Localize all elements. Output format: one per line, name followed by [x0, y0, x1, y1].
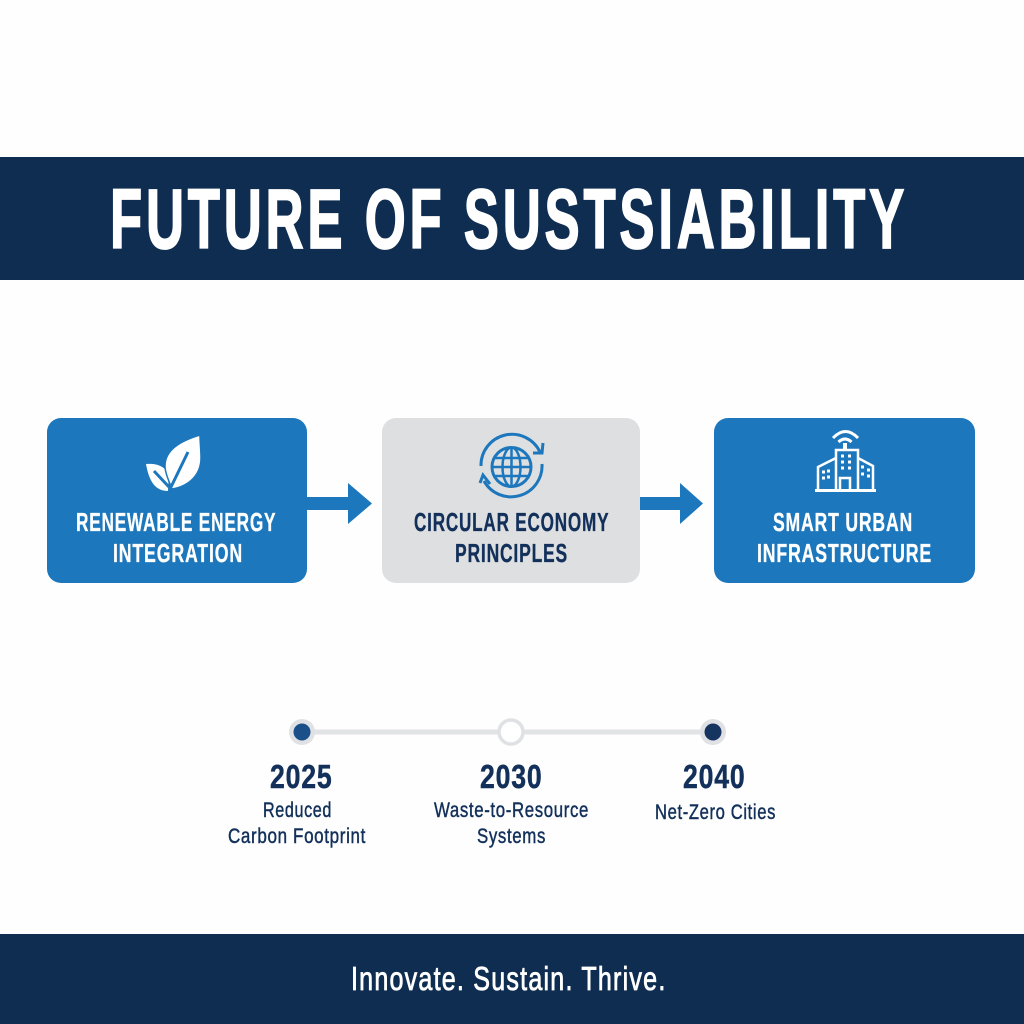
milestone 2025: Reduced — [263, 799, 332, 822]
milestone 2030: Waste-to-Resource — [434, 799, 589, 822]
arrow: renewable to circular — [307, 483, 372, 524]
card label: INTEGRATION — [113, 538, 243, 568]
card label: INFRASTRUCTURE — [757, 538, 932, 568]
milestone 2030 — [434, 720, 589, 848]
card label: SMART URBAN — [773, 507, 913, 537]
card label: PRINCIPLES — [455, 538, 568, 568]
card label: RENEWABLE ENERGY — [76, 507, 276, 537]
milestone 2025: 2025 — [270, 758, 332, 795]
icon: leaves — [146, 435, 201, 491]
card label: CIRCULAR ECONOMY — [414, 507, 609, 537]
milestone 2040: 2040 — [683, 758, 746, 795]
milestone 2040: Net-Zero Cities — [655, 801, 776, 824]
arrow: circular to urban — [640, 483, 703, 524]
milestone 2030: Systems — [477, 825, 546, 848]
milestone 2025 — [228, 719, 366, 848]
milestone 2030: 2030 — [480, 758, 542, 795]
timeline — [228, 719, 776, 848]
panel: renewable energy — [47, 418, 307, 583]
milestone 2025: Carbon Footprint — [228, 825, 366, 848]
title banner — [0, 157, 1024, 280]
milestone 2040 — [655, 719, 776, 824]
tagline: Innovate. Sustain. Thrive. — [351, 960, 666, 997]
panel: circular economy — [382, 418, 640, 583]
icon: smart building — [815, 432, 876, 490]
footer band — [0, 934, 1024, 1024]
panel: smart urban — [714, 418, 975, 583]
icon: globe with cycle arrows — [480, 434, 543, 497]
